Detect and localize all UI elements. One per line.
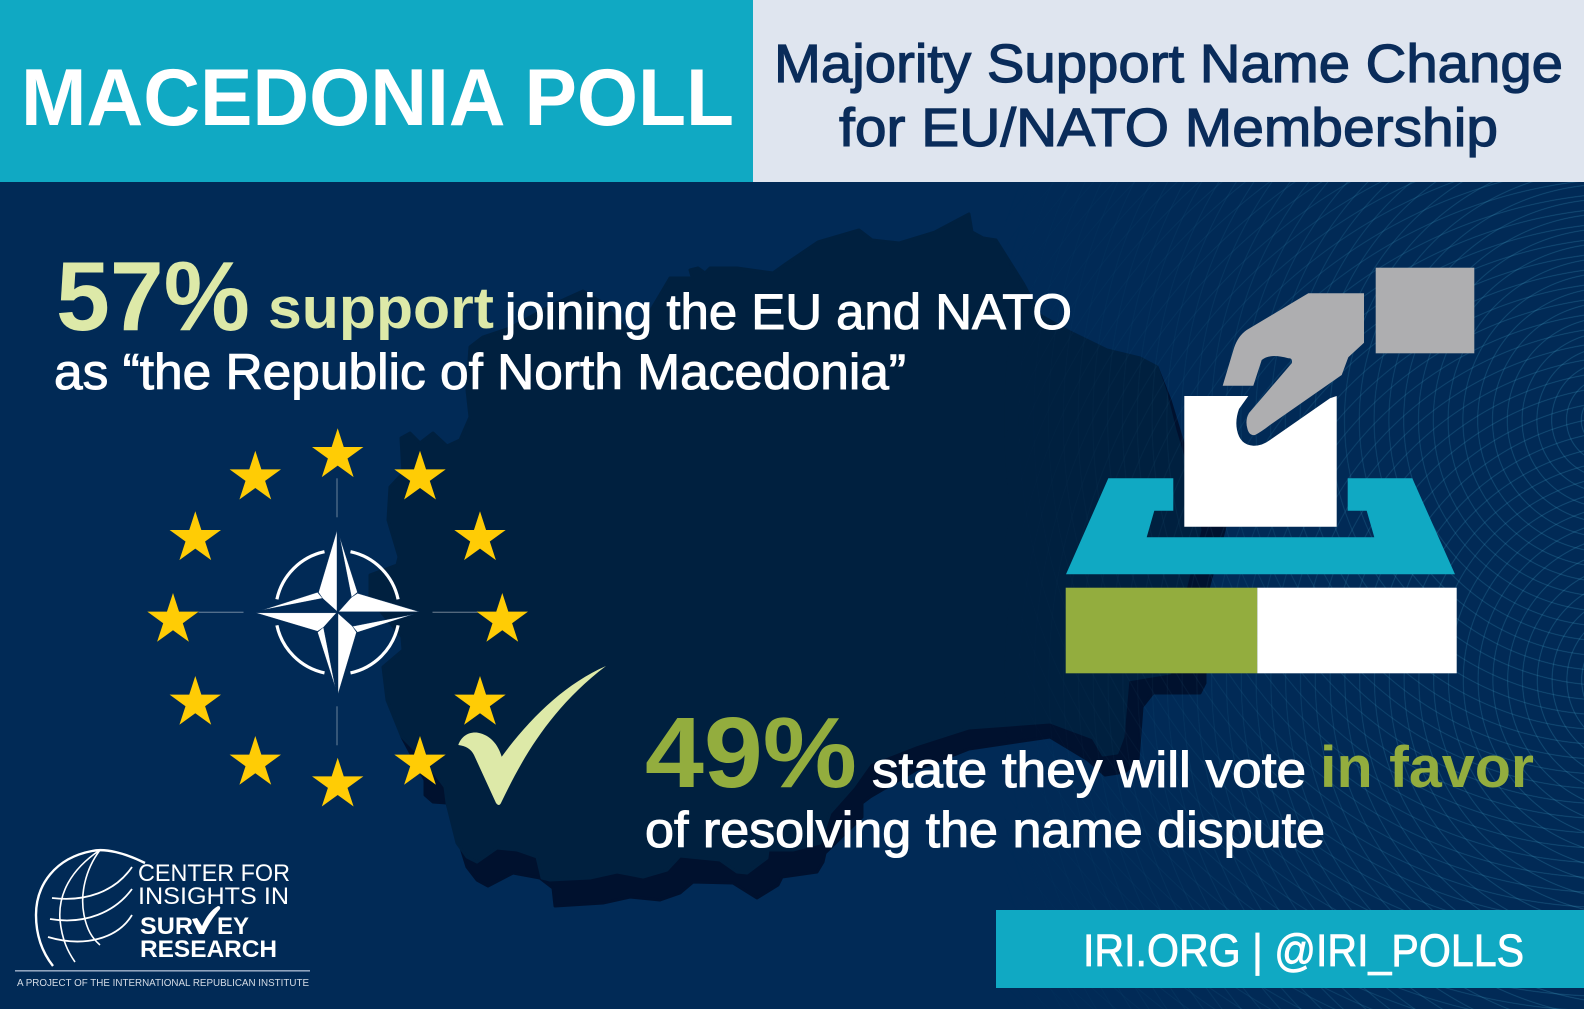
- footer banner: [996, 910, 1584, 988]
- highlighted word: support: [268, 276, 494, 341]
- statement line 2: of resolving the name dispute: [645, 802, 1325, 858]
- stat block: 49% in favor: [645, 697, 1534, 858]
- footer links text: IRI.ORG | @IRI_POLLS: [1083, 925, 1524, 976]
- box bar: green segment: [1066, 588, 1257, 673]
- logo text line 2: INSIGHTS IN: [138, 883, 289, 910]
- logo: Center for Insights in Survey Research: [15, 850, 310, 989]
- statement line 1: state they will vote: [872, 742, 1306, 798]
- background pattern: concentric moire lines: [1093, 182, 1584, 1009]
- hand cuff: [1376, 268, 1474, 353]
- EU stars ring: [147, 428, 528, 806]
- logo text line 3: SUR: [140, 913, 193, 940]
- map silhouette with shadow: [370, 214, 1225, 906]
- icon: check mark: [458, 666, 606, 805]
- ballot paper: [1184, 396, 1337, 527]
- box lid: [1066, 478, 1455, 574]
- logo text line 4: RESEARCH: [140, 936, 277, 963]
- big number 49%: 49%: [645, 697, 857, 809]
- highlighted words: in favor: [1320, 735, 1534, 800]
- big number 57%: 57%: [56, 241, 250, 351]
- logo text line 3 end: EY: [217, 913, 249, 940]
- icon: EU and NATO emblem: [147, 428, 528, 806]
- box bar: white segment: [1257, 588, 1457, 673]
- logo text line 1: CENTER FOR: [138, 860, 290, 887]
- logo check mark: [192, 906, 220, 934]
- hand: [1223, 293, 1364, 435]
- header: teal title panel: [0, 0, 753, 182]
- NATO compass: [198, 478, 478, 745]
- subtitle line 2: for EU/NATO Membership: [839, 98, 1498, 158]
- statement line 2: as “the Republic of North Macedonia”: [54, 344, 906, 400]
- title: MACEDONIA POLL: [21, 53, 734, 143]
- icon: globe: [36, 850, 145, 966]
- header: light subtitle panel: [753, 0, 1584, 182]
- icon: ballot box: [1066, 268, 1474, 673]
- subtitle line 1: Majority Support Name Change: [774, 34, 1563, 94]
- logo tagline: A PROJECT OF THE INTERNATIONAL REPUBLICAN INSTITUTE: [17, 977, 309, 989]
- statement line 1: joining the EU and NATO: [503, 284, 1072, 340]
- stat block: 57% support: [54, 241, 1072, 400]
